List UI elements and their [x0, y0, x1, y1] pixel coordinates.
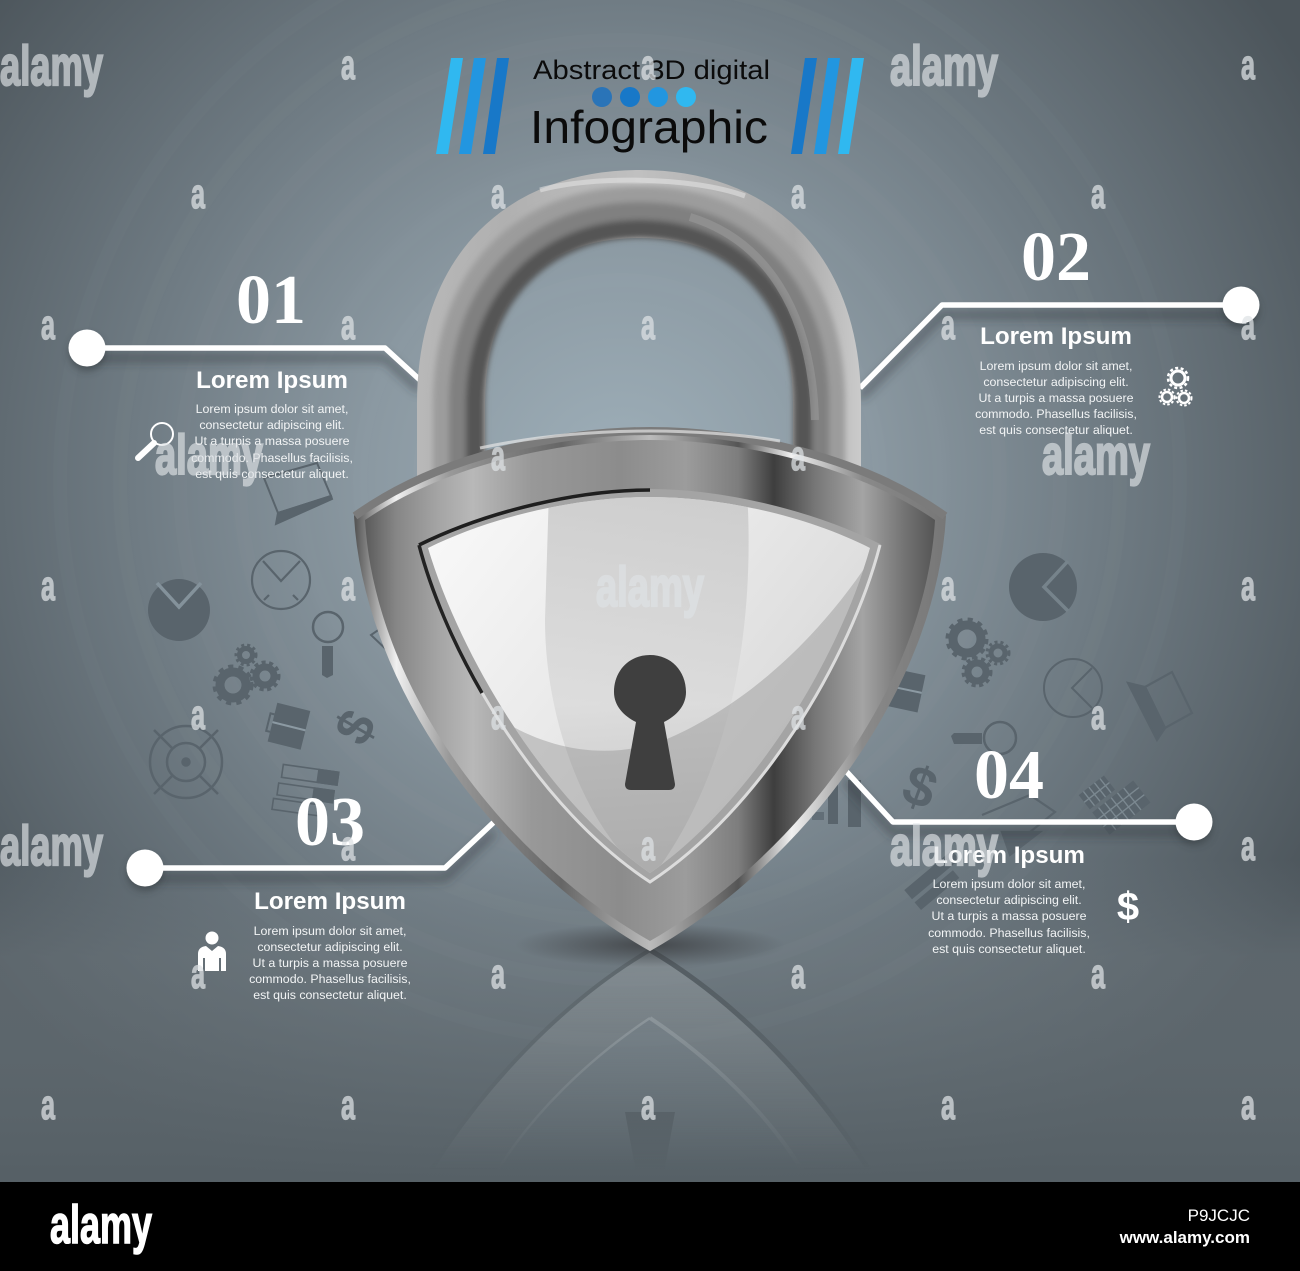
body 04: [928, 877, 1090, 956]
icon: laptop right: [1128, 672, 1192, 740]
watermark tiles: a: [641, 301, 655, 348]
body 02: consectetur adipiscing elit.: [983, 375, 1129, 389]
image id: P9JCJC: [1188, 1206, 1250, 1225]
icon: white person: [198, 932, 226, 971]
floor shadow under lock: [515, 923, 785, 967]
watermark tiles: a: [41, 1081, 55, 1128]
watermark tiles: a: [941, 301, 955, 348]
title line two: Infographic: [530, 101, 768, 153]
heading 02: Lorem Ipsum: [980, 323, 1132, 350]
watermark wordmarks: alamy: [596, 555, 704, 618]
watermark tiles: a: [941, 562, 955, 609]
footer url: www.alamy.com: [1119, 1228, 1250, 1247]
block 01: [138, 262, 353, 481]
connector 03: [126, 822, 494, 891]
icon: pie chart right: [1009, 553, 1077, 621]
number 01: 01: [236, 262, 306, 339]
body 04: consectetur adipiscing elit.: [936, 893, 1082, 907]
body 01: commodo. Phasellus facilisis,: [191, 451, 353, 465]
watermark tiles: a: [641, 822, 655, 869]
title line one: Abstract 3D digital: [533, 55, 770, 85]
heading 03: Lorem Ipsum: [254, 888, 406, 915]
body 04: commodo. Phasellus facilisis,: [928, 926, 1090, 940]
watermark tiles: a: [341, 562, 355, 609]
body 01: consectetur adipiscing elit.: [199, 418, 345, 432]
watermark tiles: a: [1241, 1081, 1255, 1128]
reflection of padlock: [476, 950, 824, 1140]
watermark tiles: a: [641, 1081, 655, 1128]
icon: white gears: [1160, 368, 1192, 406]
watermark tiles: a: [191, 950, 205, 997]
icon: magnifier right: [951, 722, 1016, 754]
body 02: [975, 359, 1137, 437]
body 03: est quis consectetur aliquet.: [253, 988, 407, 1002]
watermark tiles: a: [1091, 950, 1105, 997]
watermark wordmarks: alamy: [1042, 423, 1150, 486]
number 02: 02: [1021, 219, 1091, 296]
watermark tiles: a: [1241, 41, 1255, 88]
watermark tiles: a: [491, 691, 505, 738]
lock body: [355, 431, 945, 950]
body 01: [191, 402, 353, 481]
padlock: [355, 180, 945, 950]
watermark tiles: a: [191, 170, 205, 217]
connector lines: [68, 286, 1260, 891]
block 03: [198, 784, 411, 1002]
body 01: Ut a turpis a massa posuere: [195, 434, 350, 448]
body 04: Lorem ipsum dolor sit amet,: [933, 877, 1085, 891]
watermark wordmarks: [0, 34, 1150, 877]
icon: laptop left: [264, 463, 332, 524]
footer logo: alamy: [50, 1195, 152, 1255]
watermark tiles: a: [41, 562, 55, 609]
icon: dollar left: $: [324, 700, 388, 755]
watermark tiles: a: [491, 170, 505, 217]
icon: gears left: [215, 645, 278, 703]
body 03: [249, 924, 411, 1002]
watermark wordmarks: alamy: [155, 423, 263, 486]
icon: binders left: [272, 764, 339, 818]
icon: stack under text: [904, 850, 969, 910]
body 04: est quis consectetur aliquet.: [932, 942, 1086, 956]
title dots: [592, 87, 696, 107]
body 02: Ut a turpis a massa posuere: [979, 391, 1134, 405]
watermark wordmarks: alamy: [0, 34, 103, 97]
block 02: [975, 219, 1192, 437]
watermark tiles: a: [791, 170, 805, 217]
body 03: Ut a turpis a massa posuere: [253, 956, 408, 970]
connector 04: [845, 770, 1212, 845]
icon: binders right: [812, 778, 861, 827]
watermark tiles: [41, 41, 1255, 1128]
icon: briefcase left: [264, 702, 310, 750]
watermark tiles: a: [791, 432, 805, 479]
icon: clock left: [252, 551, 310, 609]
left bars: [436, 58, 509, 154]
block 04: [928, 737, 1139, 956]
watermark tiles: a: [341, 1081, 355, 1128]
right bars: [791, 58, 864, 154]
icon: white magnifier: [138, 423, 173, 458]
icon: dollar right: $: [895, 752, 946, 821]
footer bar: [0, 1182, 1300, 1271]
watermark tiles: a: [641, 41, 655, 88]
shadows of connectors: [87, 315, 1241, 878]
icon: white dollar: $: [1117, 885, 1139, 929]
body 03: Lorem ipsum dolor sit amet,: [254, 924, 406, 938]
decorative business icons left: [148, 463, 392, 818]
body 02: Lorem ipsum dolor sit amet,: [980, 359, 1132, 373]
watermark tiles: a: [491, 432, 505, 479]
body 04: Ut a turpis a massa posuere: [932, 909, 1087, 923]
connector 02: [860, 286, 1260, 388]
icon: laptop under line: [982, 795, 1055, 855]
title block: [436, 55, 864, 154]
watermark tiles: a: [1241, 822, 1255, 869]
shackle: [451, 180, 827, 490]
icon: pie chart left: [148, 579, 210, 641]
heading 04: Lorem Ipsum: [933, 842, 1085, 869]
glass panel: [419, 490, 880, 890]
body 03: consectetur adipiscing elit.: [257, 940, 403, 954]
keyhole: [614, 655, 686, 790]
connector 01: [68, 330, 420, 380]
watermark tiles: a: [341, 822, 355, 869]
watermark tiles: a: [191, 691, 205, 738]
watermark wordmarks: alamy: [890, 814, 998, 877]
icon: target left: [150, 726, 222, 798]
body 01: est quis consectetur aliquet.: [195, 467, 349, 481]
icon: magnifier left: [313, 612, 343, 678]
watermark wordmarks: alamy: [890, 34, 998, 97]
watermark tiles: a: [791, 950, 805, 997]
body 02: commodo. Phasellus facilisis,: [975, 407, 1137, 421]
decorative business icons right: [812, 553, 1192, 910]
icon: clock right: [1044, 659, 1102, 717]
icon: keyboard right: [1079, 763, 1150, 835]
watermark tiles: a: [1091, 170, 1105, 217]
body 02: est quis consectetur aliquet.: [979, 423, 1133, 437]
watermark tiles: a: [941, 1081, 955, 1128]
watermark tiles: a: [341, 41, 355, 88]
watermark tiles: a: [1241, 562, 1255, 609]
icon: partial diamond left: [371, 622, 392, 655]
icon: briefcase right: [888, 669, 925, 712]
number 04: 04: [974, 737, 1044, 814]
watermark tiles: a: [41, 301, 55, 348]
watermark tiles: a: [1241, 301, 1255, 348]
number 03: 03: [295, 784, 365, 861]
heading 01: Lorem Ipsum: [196, 367, 348, 394]
icon: gears right: [948, 620, 1009, 686]
watermark tiles: a: [341, 301, 355, 348]
watermark tiles: a: [1091, 691, 1105, 738]
body 03: commodo. Phasellus facilisis,: [249, 972, 411, 986]
body 01: Lorem ipsum dolor sit amet,: [196, 402, 348, 416]
watermark tiles: a: [491, 950, 505, 997]
watermark tiles: a: [791, 691, 805, 738]
watermark wordmarks: alamy: [0, 814, 103, 877]
